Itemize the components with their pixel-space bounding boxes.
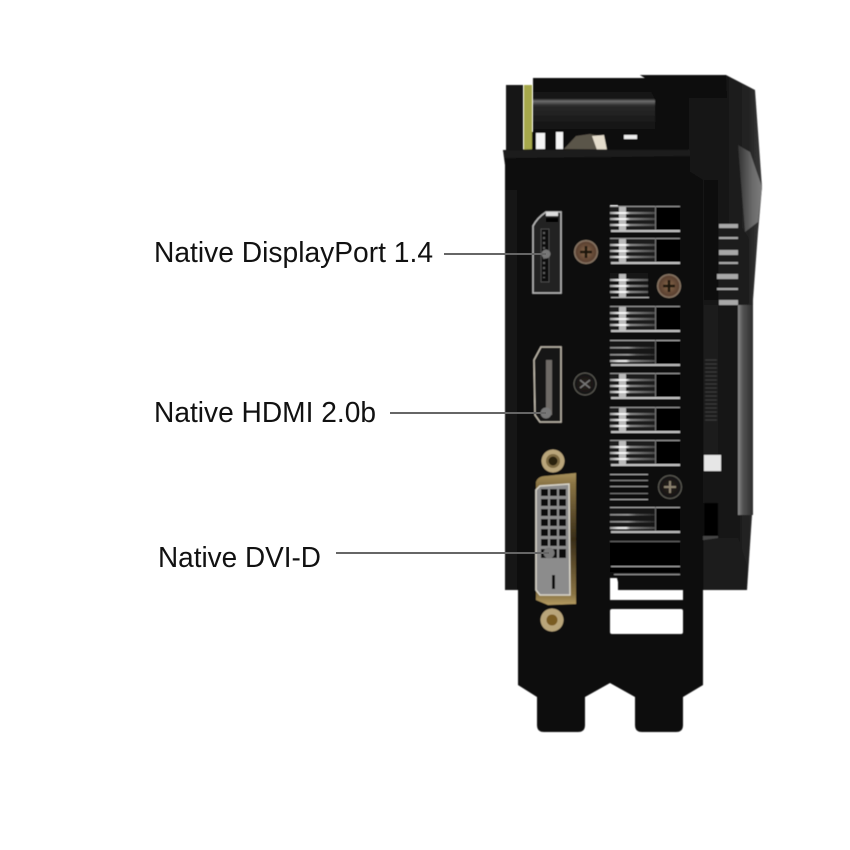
- top jack post: [542, 450, 564, 472]
- shroud side facet: [738, 145, 762, 232]
- ventilation slots showing heatsink fins: [610, 206, 680, 575]
- PCB edge: [506, 85, 523, 153]
- bottom jack post: [540, 608, 564, 632]
- DisplayPort connector: [533, 212, 561, 293]
- slot row 5: [610, 340, 680, 366]
- top shroud block: [533, 78, 655, 153]
- cooler shroud: [618, 75, 762, 590]
- screw upper right: [657, 274, 681, 298]
- slot row 11: [610, 541, 680, 575]
- HDMI connector: [534, 347, 561, 422]
- slot row 6: [610, 373, 680, 399]
- graphics card body behind bracket: [506, 75, 762, 590]
- slot row 8: [610, 440, 680, 466]
- label: Native DisplayPort 1.4: Native DisplayPort 1.4: [154, 237, 433, 269]
- heatsink fin stack: [703, 180, 753, 590]
- screw lower right: [658, 475, 682, 499]
- connector gold frame: [536, 473, 576, 605]
- blade slot: [552, 575, 555, 589]
- DisplayPort contact dot: [542, 250, 550, 258]
- screw middle: [574, 372, 596, 396]
- gap in shroud showing heatsink: [532, 132, 640, 153]
- HDMI contact dot: [540, 408, 552, 418]
- bracket top lip: [503, 150, 690, 158]
- slot row 9: [610, 474, 648, 500]
- DVI contact dot: [544, 548, 554, 558]
- leader line: HDMI: [390, 412, 546, 414]
- slot row 7: [610, 407, 680, 433]
- slot row 2: [610, 238, 680, 264]
- pin grid: [541, 489, 566, 558]
- screw top: [574, 240, 598, 264]
- front shroud cap: [640, 75, 727, 98]
- bracket screws: [574, 240, 682, 499]
- slot row 1: [610, 206, 680, 232]
- leader line: DVI-D: [336, 552, 549, 554]
- slot row 3: [610, 273, 649, 298]
- metal I/O bracket: [503, 149, 703, 732]
- bracket edge shading: [505, 190, 517, 590]
- yellow PCB strip: [524, 85, 532, 151]
- slot row 10: [610, 507, 680, 533]
- label: Native DVI-D: Native DVI-D: [158, 542, 321, 574]
- leader line: DisplayPort: [444, 253, 546, 255]
- slot row 4: [610, 306, 680, 332]
- label: Native HDMI 2.0b: Native HDMI 2.0b: [154, 397, 376, 429]
- DVI-D connector: [536, 450, 576, 632]
